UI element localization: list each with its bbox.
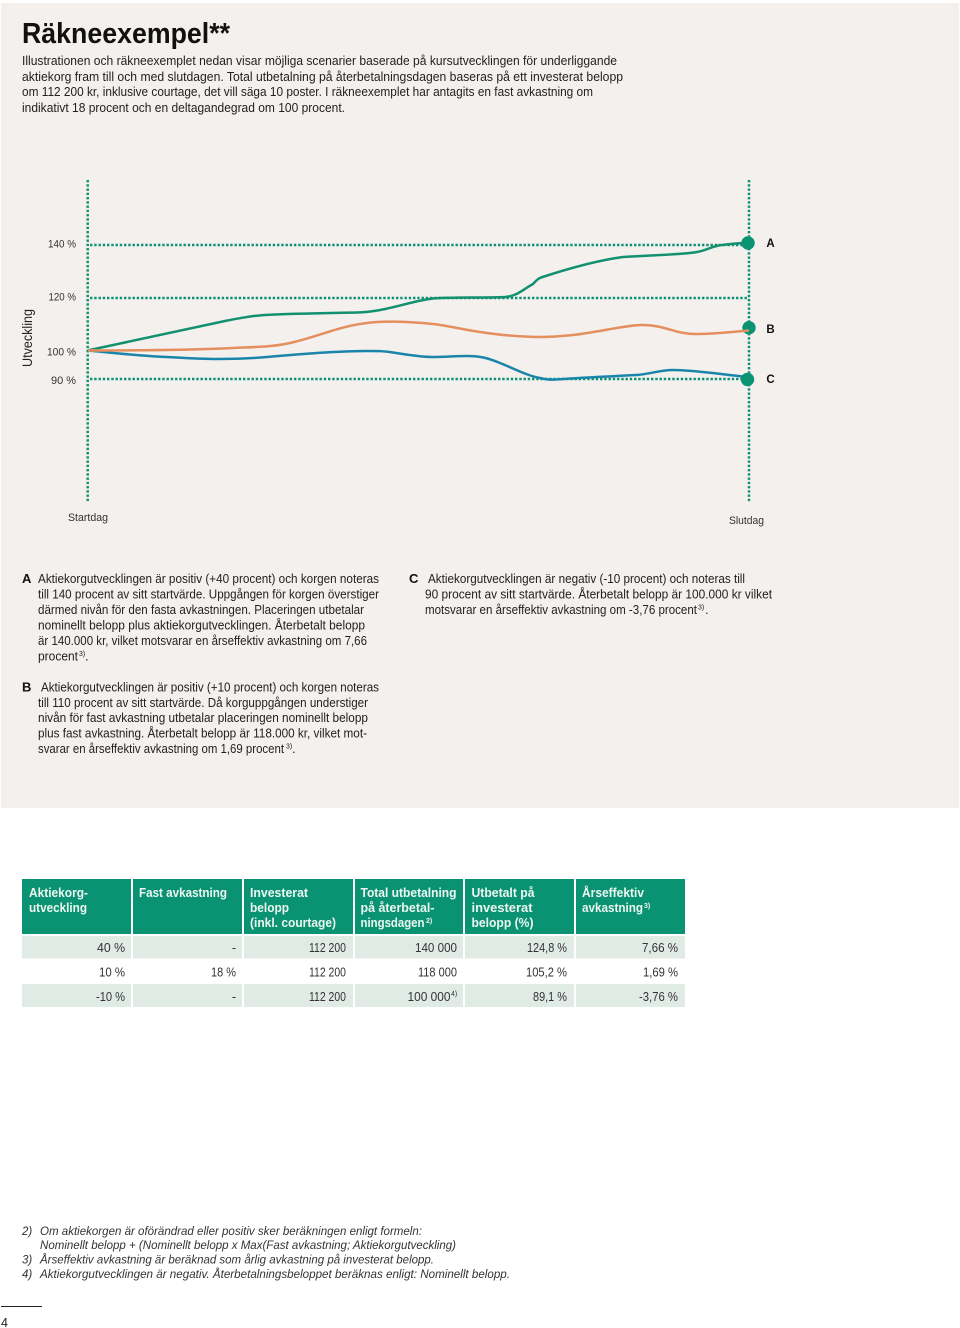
text block: scenario B: svarar en årseffektiv avkastning om 1,69 procent — [38, 741, 284, 756]
table row 3: 112 200 — [309, 990, 346, 1004]
text block: scenario A: därmed nivån för den fasta avkastningen. Placeringen utbetalar — [38, 602, 365, 617]
axis labels: Slutdag — [729, 515, 764, 527]
table header: Total utbetalning — [360, 886, 456, 900]
footnotes: Nominellt belopp + (Nominellt belopp x Max(Fast avkastning; Aktiekorgutveckling) — [40, 1240, 456, 1252]
table row 1: 140 000 — [415, 941, 457, 955]
table row 3 — [22, 984, 685, 1007]
table header — [22, 879, 685, 934]
table row 2: 105,2 % — [526, 966, 567, 980]
text block: scenario C: 3) — [698, 604, 704, 612]
table row 3: 4) — [451, 991, 457, 998]
footnotes: Årseffektiv avkastning är beräknad som årlig avkastning på investerat belopp. — [39, 1254, 434, 1266]
title: Räkneexempel** — [22, 18, 231, 50]
line: scenario B (orange) — [88, 322, 749, 350]
footnotes: 3) — [22, 1254, 32, 1266]
panel: beige background — [1, 3, 959, 808]
table row 3: 100 000 — [408, 990, 451, 1004]
chart grid: dotted axes and levels — [88, 180, 749, 503]
table header: avkastning — [582, 901, 643, 915]
axis labels: 90 % — [51, 375, 76, 387]
table row 2: 10 % — [99, 966, 125, 980]
table row 1: 124,8 % — [527, 941, 567, 955]
scenario letters: A — [766, 238, 775, 250]
text block: scenario B: Aktiekorgutvecklingen är positiv (+10 procent) och korgen noteras — [41, 680, 379, 694]
table header: belopp — [250, 901, 289, 915]
text block: scenario C: motsvarar en årseffektiv avkastning om -3,76 procent — [425, 602, 697, 617]
text block: scenario A: 3) — [79, 651, 85, 658]
text block: scenario A — [22, 571, 380, 664]
table — [22, 879, 685, 1007]
table row 3: 89,1 % — [533, 990, 567, 1004]
table header: (inkl. courtage) — [250, 916, 336, 930]
table row 2 — [99, 966, 678, 980]
marker: C — [741, 373, 754, 386]
text block: scenario B: plus fast avkastning. Återbetalt belopp är 118.000 kr, vilket mot- — [38, 726, 367, 740]
table header: på återbetal- — [360, 901, 434, 915]
line: scenario C (blue) — [88, 350, 748, 380]
text block: scenario A: A — [22, 571, 32, 586]
text block: scenario B: 3) — [286, 744, 292, 750]
text block: scenario A: Aktiekorgutvecklingen är positiv (+40 procent) och korgen noteras — [38, 571, 379, 586]
intro text: indikativt 18 procent och en deltagandegrad om 100 procent. — [22, 100, 345, 115]
table row 2: 118 000 — [418, 966, 457, 980]
table header: investerat — [472, 901, 533, 915]
text block: scenario C: . — [705, 602, 709, 617]
text block: scenario B: B — [22, 680, 31, 694]
table row 3: -10 % — [96, 990, 125, 1004]
marker: B — [742, 321, 756, 334]
table header: Aktiekorg- — [29, 886, 88, 900]
line chart — [20, 180, 775, 527]
text block: scenario A: är 140.000 kr, vilket motsvarar en årseffektiv avkastning om 7,66 — [38, 633, 367, 648]
text block: scenario C: C — [409, 571, 419, 586]
table row 1: 40 % — [97, 941, 125, 955]
axis labels: Startdag — [68, 512, 108, 524]
table row 3: -3,76 % — [639, 990, 678, 1004]
text block: scenario A: . — [85, 648, 89, 664]
text block: scenario B: nivån för fast avkastning utbetalar placeringen nominellt belopp — [38, 710, 368, 725]
footnotes: Om aktiekorgen är oförändrad eller positiv sker beräkningen enligt formeln: — [40, 1226, 422, 1238]
text block: scenario B — [22, 680, 379, 756]
table row 1: 112 200 — [309, 941, 346, 955]
text block: scenario A: nominellt belopp plus aktiekorgutvecklingen. Återbetalt belopp — [38, 618, 365, 632]
line: scenario A (green) — [88, 243, 747, 350]
text block: scenario B: . — [292, 741, 296, 756]
text block: scenario C: Aktiekorgutvecklingen är negativ (-10 procent) och noteras till — [428, 571, 745, 586]
axis labels: 100 % — [47, 346, 76, 358]
table row 3: - — [232, 990, 236, 1004]
table row 1 — [22, 936, 685, 958]
table header: 2) — [426, 918, 432, 925]
page number — [1, 1306, 42, 1328]
axis labels: Utveckling — [20, 309, 35, 367]
intro text: aktiekorg fram till och med slutdagen. Total utbetalning på återbetalningsdagen baseras på ett investerat belopp — [22, 69, 623, 84]
footnotes: Aktiekorgutvecklingen är negativ. Återbetalningsbeloppet beräknas enligt: Nominellt belopp. — [39, 1268, 510, 1281]
table header: utveckling — [29, 901, 87, 915]
text block: scenario B: till 110 procent av sitt startvärde. Då korguppgången understiger — [38, 695, 369, 710]
table header: belopp (%) — [472, 916, 534, 930]
footnotes: 4) — [22, 1269, 32, 1281]
table header: Investerat — [250, 886, 309, 900]
table header: ningsdagen — [360, 916, 424, 930]
text block: scenario C: 90 procent av sitt startvärde. Återbetalt belopp är 100.000 kr vilket — [425, 586, 772, 602]
table header: Årseffektiv — [582, 885, 644, 900]
table header: Utbetalt på — [472, 886, 535, 900]
text block: scenario C — [409, 571, 772, 617]
text block: scenario A: till 140 procent av sitt startvärde. Uppgången för korgen överstiger — [38, 586, 380, 602]
table row 1: - — [232, 941, 236, 955]
table row 2: 18 % — [211, 966, 236, 980]
table row 1: 7,66 % — [642, 941, 678, 955]
scenario letters: C — [766, 374, 775, 386]
intro text: Illustrationen och räkneexemplet nedan visar möjliga scenarier baserade på kursutvecklingen för underliggande — [22, 53, 617, 68]
intro text — [22, 53, 623, 115]
scenario letters — [766, 238, 775, 386]
table header: Fast avkastning — [139, 886, 227, 900]
axis labels: 140 % — [48, 238, 76, 250]
footnotes: 2) — [21, 1226, 32, 1238]
marker: A — [741, 236, 755, 250]
axis labels — [20, 238, 764, 527]
table row 2: 1,69 % — [643, 966, 678, 980]
footnotes — [21, 1226, 510, 1281]
table row 2: 112 200 — [309, 966, 346, 980]
axis labels: 120 % — [48, 292, 76, 304]
intro text: om 112 200 kr, inklusive courtage, det vill säga 10 poster. I räkneexemplet har antagits en fast avkastning om — [22, 84, 593, 99]
text block: scenario A: procent — [38, 648, 78, 664]
table header: 3) — [644, 903, 650, 910]
scenario letters: B — [766, 324, 775, 336]
